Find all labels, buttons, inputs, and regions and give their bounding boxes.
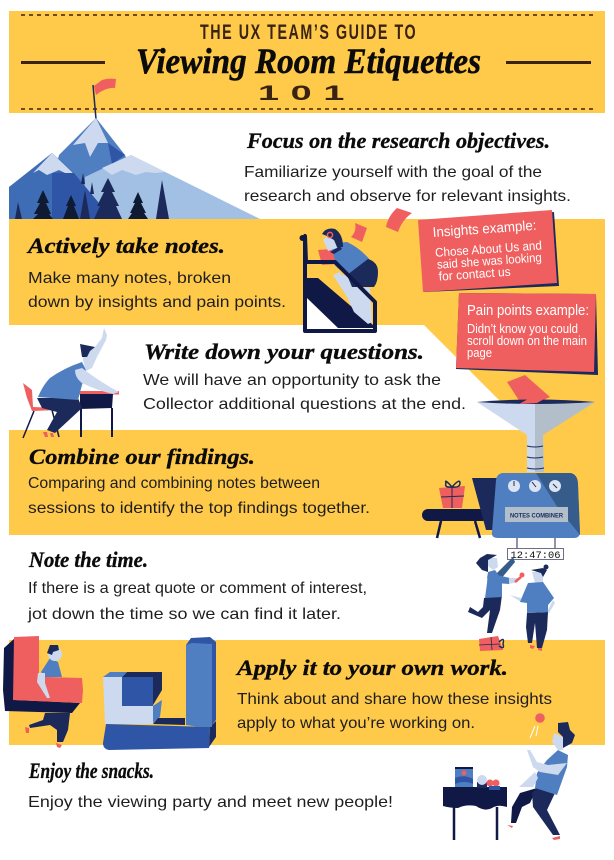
callout: insights example: Insights example:: [432, 217, 537, 240]
text block: time: Note the time.: [28, 547, 148, 572]
icon: blue couch: [103, 637, 216, 750]
icon: man catching snack: [507, 713, 575, 840]
callout: insights example: [418, 210, 559, 292]
text block: apply: apply to what you’re working on.: [237, 715, 475, 732]
text block: focus: Familiarize yourself with the goal of the: [244, 164, 542, 181]
panel: yellow band apply: [9, 640, 605, 745]
text block: snacks: Enjoy the snacks.: [28, 758, 154, 783]
icon: woman on stairs taking notes: [300, 223, 378, 331]
title: 101: 101: [258, 81, 344, 105]
text block: findings: Comparing and combining notes between: [28, 475, 320, 492]
icon: timer display: 12:47:06: [510, 550, 560, 562]
text block: notes: down by insights and pain points.: [28, 294, 286, 311]
text block: apply: Think about and share how these insights: [237, 691, 552, 708]
text block: time: If there is a great quote or comment of interest,: [28, 580, 367, 597]
text block: notes: Make many notes, broken: [28, 270, 231, 287]
text block: notes: [26, 233, 286, 311]
text block: questions: Collector additional questions at the end.: [143, 396, 466, 413]
icon: flying paper: [386, 208, 412, 232]
text block: questions: We will have an opportunity to ask the: [143, 372, 441, 389]
text block: findings: Combine our findings.: [29, 444, 255, 469]
callout: insights example: Chose About Us and: [435, 238, 542, 260]
callout: pain points example: scroll down on the main: [467, 334, 587, 348]
text block: questions: [143, 339, 466, 413]
panel: header banner: [9, 11, 605, 113]
text block: snacks: Enjoy the viewing party and meet new people!: [28, 794, 393, 811]
panel: diagonal yellow wedge: [424, 325, 605, 430]
icon: man at desk raising hand: [23, 328, 119, 438]
text block: focus: research and observe for relevant insights.: [244, 188, 571, 205]
text block: time: jot down the time so we can find it later.: [27, 606, 341, 623]
panel: yellow band notes: [9, 219, 605, 325]
callout: insights example: for contact us: [438, 265, 511, 284]
icon: man carrying red couch: [3, 636, 83, 748]
text block: focus: Focus on the research objectives.: [246, 128, 550, 153]
text block: findings: sessions to identify the top findings together.: [28, 500, 370, 517]
callout: pain points example: page: [467, 346, 492, 360]
callout: pain points example: Didn’t know you could: [467, 322, 578, 336]
text block: questions: Write down your questions.: [144, 339, 424, 364]
callout: pain points example: Pain points example:: [467, 303, 589, 319]
icon: mountains with flag: [9, 79, 260, 219]
callout: insights example: said she was looking: [436, 250, 542, 272]
icon: two people celebrating with microphone: [468, 554, 555, 651]
text block: snacks: [28, 758, 393, 811]
icon: notes combiner funnel machine: NOTES COMBINER: [510, 514, 564, 520]
icon: snack table: [443, 767, 507, 840]
title: viewing room etiquettes: Viewing Room Etiquettes: [136, 41, 481, 81]
icon: notes combiner funnel machine: [422, 375, 595, 548]
text block: apply: Apply it to your own work.: [235, 655, 508, 680]
callout: pain points example: [456, 293, 598, 375]
text block: time: [27, 547, 367, 623]
panel: yellow band findings: [9, 430, 605, 535]
title: guide line: THE UX TEAM’S GUIDE TO: [200, 20, 416, 44]
text block: notes: Actively take notes.: [26, 233, 225, 258]
text block: apply: [235, 655, 552, 732]
text block: findings: [28, 444, 370, 517]
text block: focus: [244, 128, 571, 205]
